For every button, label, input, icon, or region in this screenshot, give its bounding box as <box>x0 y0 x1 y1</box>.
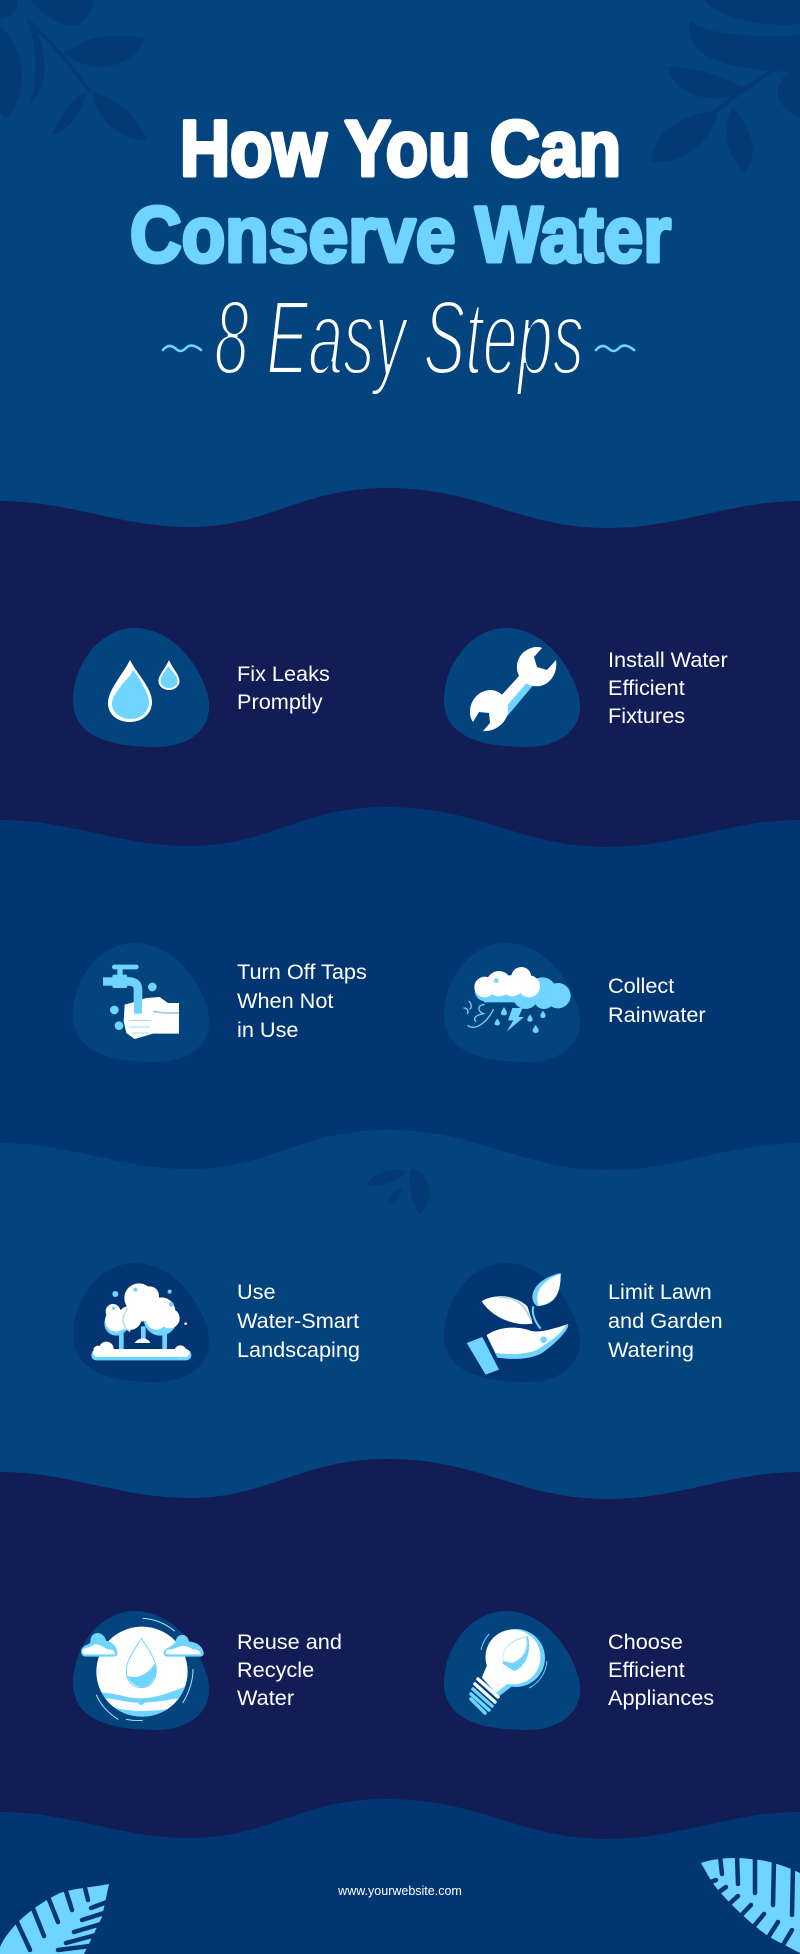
step 8: efficient appliances <box>444 1611 714 1730</box>
band 4 background <box>0 1459 800 1954</box>
band 1 background <box>0 488 800 1954</box>
step 2: install fixtures <box>444 628 728 747</box>
decoration: centre leaves <box>367 1168 429 1214</box>
label <box>608 973 706 1027</box>
label: Fixtures <box>608 703 685 728</box>
icon: faucet and hands <box>73 943 209 1062</box>
decoration: bottom left leaf <box>0 1884 109 1954</box>
label <box>608 647 728 728</box>
label: Promptly <box>237 689 323 714</box>
step 5: water-smart landscaping <box>73 1263 360 1382</box>
label: and Garden <box>608 1308 723 1333</box>
label: Reuse and <box>237 1629 342 1654</box>
label: Use <box>237 1279 276 1304</box>
label: Collect <box>608 973 674 998</box>
label: Recycle <box>237 1657 314 1682</box>
label: Appliances <box>608 1685 714 1710</box>
label <box>608 1279 723 1362</box>
icon: water cycle globe <box>73 1611 209 1730</box>
band 5 background <box>0 1799 800 1954</box>
label: Choose <box>608 1629 683 1654</box>
label: Rainwater <box>608 1002 706 1027</box>
band 2 background <box>0 807 800 1954</box>
label: Turn Off Taps <box>237 959 367 984</box>
icon: hand with plant <box>444 1263 580 1382</box>
label: Fix Leaks <box>237 661 330 686</box>
label: Water-Smart <box>237 1308 359 1333</box>
label: Water <box>237 1685 294 1710</box>
footer website: www.yourwebsite.com <box>337 1884 462 1898</box>
step 1: fix leaks <box>73 628 330 747</box>
subtitle right wave mark <box>596 346 634 351</box>
label <box>237 661 330 714</box>
title <box>130 104 671 278</box>
step 4: collect rainwater <box>444 943 706 1062</box>
title line 2: Conserve Water <box>130 190 671 278</box>
step 7: reuse and recycle <box>73 1611 342 1730</box>
step 6: limit lawn watering <box>444 1263 723 1382</box>
label: Landscaping <box>237 1337 360 1362</box>
label <box>237 1629 342 1710</box>
label: Efficient <box>608 675 685 700</box>
icon: storm cloud <box>444 943 580 1062</box>
label: in Use <box>237 1017 298 1042</box>
icon: light bulb with leaf <box>444 1611 580 1730</box>
decoration: top right leaves <box>651 0 800 172</box>
decoration: bottom right leaf <box>701 1855 800 1953</box>
decoration: top left leaves <box>0 0 147 140</box>
icon: wrench <box>444 628 580 747</box>
label: Efficient <box>608 1657 685 1682</box>
label: Limit Lawn <box>608 1279 712 1304</box>
icon: water drops <box>73 628 209 747</box>
title line 1: How You Can <box>180 104 621 192</box>
label <box>237 959 367 1042</box>
label <box>608 1629 714 1710</box>
label: Install Water <box>608 647 728 672</box>
subtitle left wave mark <box>163 346 201 351</box>
icon: trees <box>73 1263 209 1382</box>
label <box>237 1279 360 1362</box>
label: When Not <box>237 988 333 1013</box>
step 3: turn off taps <box>73 943 367 1062</box>
band 3 background <box>0 1130 800 1954</box>
label: Watering <box>608 1337 694 1362</box>
